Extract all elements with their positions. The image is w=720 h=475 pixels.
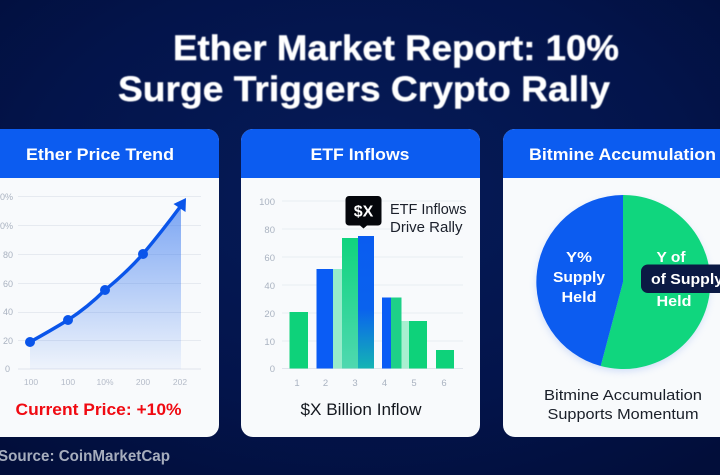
- line chart: price trend: [0, 192, 201, 387]
- panel: ETF inflows: [241, 129, 480, 437]
- pill label: of supply: of Supply: [651, 271, 720, 288]
- callout: $X: [346, 196, 382, 228]
- bar chart: ETF inflows: 3: [352, 378, 358, 389]
- panel header: Ether Price Trend: [0, 129, 219, 178]
- callout: $X: $X: [354, 204, 374, 220]
- bar chart: ETF inflows: 5: [411, 378, 417, 389]
- bar chart: ETF inflows: 6: [441, 378, 447, 389]
- annotation: ETF inflows drive rally: ETF Inflows: [390, 202, 466, 218]
- pie caption: Supports Momentum: [548, 407, 698, 423]
- pie chart: supply held: [536, 195, 720, 371]
- line chart: price trend: 20: [3, 336, 13, 346]
- line chart: price trend: 100: [61, 377, 75, 387]
- panel header: ETF Inflows: ETF Inflows: [310, 145, 410, 164]
- line chart: price trend: 200: [136, 377, 150, 387]
- source note: Source: CoinMarketCap: [0, 448, 170, 465]
- pie caption: [544, 388, 702, 423]
- panel header: ETF Inflows: [241, 129, 480, 178]
- pie caption: Bitmine Accumulation: [544, 388, 702, 404]
- annotation: ETF inflows drive rally: Drive Rally: [390, 220, 463, 236]
- line chart: price trend: 202: [173, 377, 187, 387]
- bar chart: ETF inflows: 2: [323, 378, 328, 389]
- line chart: price trend: 10%: [96, 377, 114, 387]
- pie label: blue slice: [553, 249, 606, 306]
- bar chart: ETF inflows: 40: [264, 281, 275, 292]
- pie label: green slice: [656, 249, 692, 310]
- pie label: green slice: Held: [656, 293, 692, 310]
- inflow label: $X Billion Inflow: [300, 400, 422, 419]
- line chart: price trend: 80: [3, 250, 13, 260]
- bar chart: ETF inflows: 60: [264, 253, 275, 264]
- pill label: of supply: [641, 264, 720, 293]
- line chart: price trend: 100: [24, 377, 38, 387]
- bar chart: ETF inflows: 10: [264, 337, 275, 348]
- panel: Ether price trend: [0, 129, 219, 437]
- panel header: Ether Price Trend: Ether Price Trend: [26, 145, 174, 164]
- panel header: Bitmine Accumulation: Bitmine Accumulation: [529, 145, 716, 164]
- bar chart: ETF inflows: 100: [259, 197, 275, 208]
- bar chart: ETF inflows: 20: [264, 309, 275, 320]
- bar chart: ETF inflows: 80: [264, 225, 275, 236]
- bar chart: ETF inflows: 1: [294, 378, 300, 389]
- pie label: blue slice: Supply: [553, 269, 606, 286]
- annotation: ETF inflows drive rally: [390, 202, 466, 236]
- panel header: Bitmine Accumulation: [503, 129, 720, 178]
- line chart: price trend: 0: [5, 364, 10, 374]
- line chart: price trend: 40: [3, 307, 13, 317]
- pie label: blue slice: Y%: [566, 249, 592, 266]
- title: Ether Market Report: 10%: [173, 29, 619, 68]
- pie label: green slice: Y of: [656, 249, 687, 266]
- title: [118, 29, 619, 109]
- current price label: Current Price: +10%: [16, 400, 182, 419]
- pie label: blue slice: Held: [562, 289, 596, 306]
- bar chart: ETF inflows: 0: [270, 364, 275, 375]
- title: Surge Triggers Crypto Rally: [118, 70, 611, 109]
- line chart: price trend: 60: [3, 279, 13, 289]
- bar chart: ETF inflows: 4: [382, 378, 387, 389]
- bar chart: ETF inflows: [259, 197, 463, 389]
- panel: Bitmine accumulation: [503, 129, 720, 437]
